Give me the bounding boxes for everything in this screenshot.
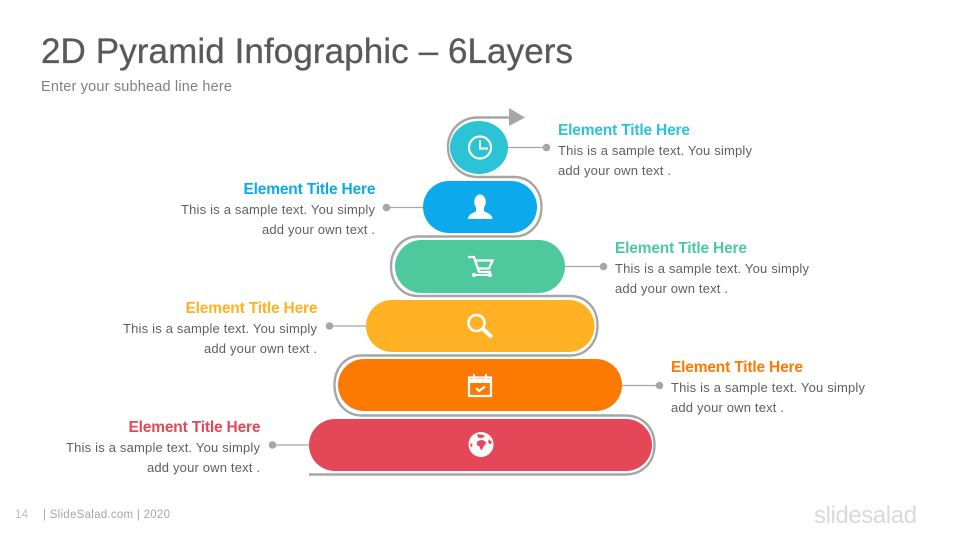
layer 3: green pill: [395, 240, 565, 293]
text block: red: This is a sample text. You simply: [66, 440, 260, 455]
connector: orange: [622, 382, 663, 389]
icon: shopping cart: [468, 257, 492, 277]
icon: globe: [468, 432, 494, 457]
text block: orange: Element Title Here: [671, 359, 803, 376]
connector: teal: [508, 144, 550, 151]
text block: blue: add your own text .: [262, 222, 375, 237]
text block: blue: This is a sample text. You simply: [181, 202, 376, 217]
text block: yellow: Element Title Here: [186, 300, 318, 317]
connector: yellow: [326, 322, 366, 330]
title: 2D Pyramid Infographic – 6Layers: [41, 32, 573, 71]
footer text: | SlideSalad.com | 2020: [43, 509, 170, 521]
text block: teal: This is a sample text. You simply: [558, 143, 752, 158]
text block: green: This is a sample text. You simply: [615, 261, 810, 276]
text block: red: Element Title Here: [128, 419, 261, 436]
text block: green: add your own text .: [615, 281, 728, 296]
text block: blue: Element Title Here: [244, 181, 376, 198]
text block: yellow: [123, 300, 318, 356]
text block: teal: Element Title Here: [558, 122, 690, 139]
icon: magnifier: [468, 315, 490, 336]
text block: yellow: add your own text .: [204, 341, 317, 356]
connector: blue: [383, 204, 423, 211]
text block: blue: [181, 181, 376, 237]
text block: yellow: This is a sample text. You simply: [123, 321, 318, 336]
layer 5: orange pill: [338, 359, 622, 411]
layer 1: teal circle: [450, 121, 508, 174]
icon: person: [468, 194, 492, 219]
page number: 14: [15, 509, 29, 521]
logo: slidesalad: [814, 502, 917, 529]
connector: green: [565, 263, 607, 270]
layer 4: yellow pill: [366, 300, 594, 352]
text block: teal: add your own text .: [558, 163, 671, 178]
text block: orange: [671, 359, 866, 415]
text block: red: [66, 419, 261, 475]
text block: green: [615, 240, 810, 296]
icon: clock: [469, 136, 491, 158]
subtitle: Enter your subhead line here: [41, 79, 232, 95]
layer 6: red pill: [309, 419, 652, 471]
text block: green: Element Title Here: [615, 240, 747, 257]
text block: orange: This is a sample text. You simply: [671, 380, 866, 395]
connector: red: [269, 441, 309, 449]
icon: calendar: [469, 374, 491, 396]
text block: red: add your own text .: [147, 460, 260, 475]
layer 2: blue pill: [423, 181, 537, 233]
serpentine line with arrow: [309, 108, 654, 474]
text block: teal: [558, 122, 752, 178]
text block: orange: add your own text .: [671, 400, 784, 415]
